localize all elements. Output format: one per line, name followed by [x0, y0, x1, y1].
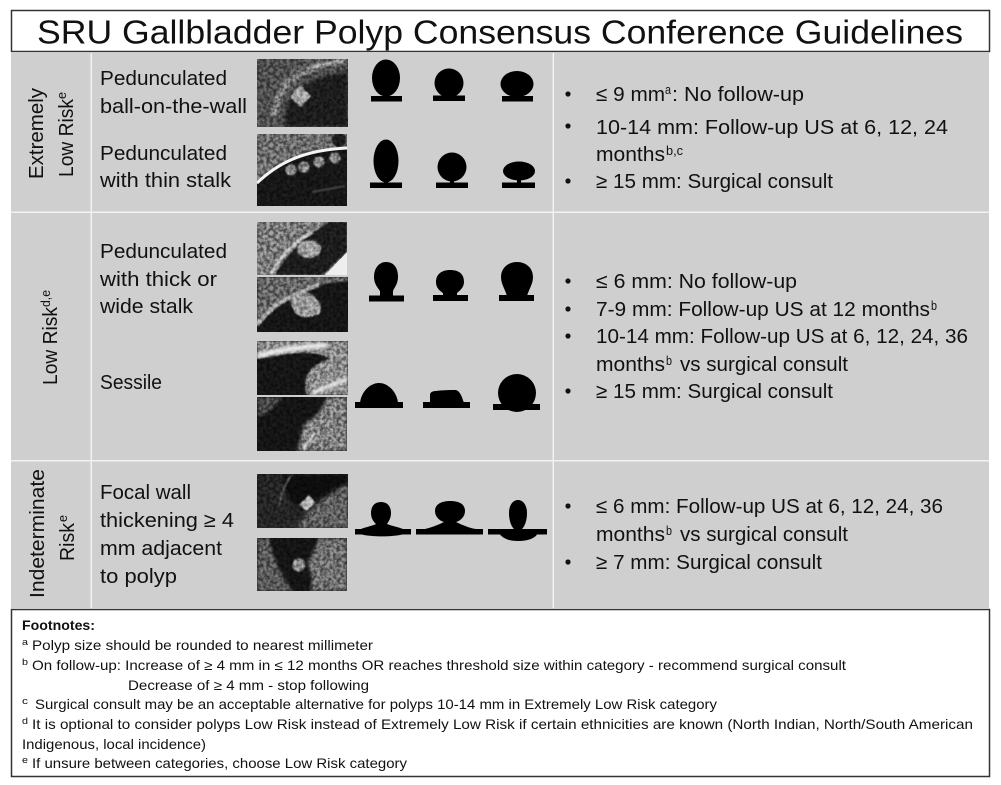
footnote c: c: [22, 696, 28, 707]
footnote c: Surgical consult may be an acceptable alternative for polyps 10-14 mm in Extremely Low Risk category: [35, 697, 717, 712]
risk label: extremely low risk: Low Risk: [55, 98, 78, 177]
polyp diagrams: thick or wide stalk: [369, 262, 534, 302]
risk label: indeterminate risk: e: [56, 515, 70, 522]
ultrasound image: sessile 1: [257, 341, 348, 395]
management recommendations: extremely low risk: ≥ 15 mm: Surgical consult: [596, 170, 833, 193]
management recommendations: indeterminate risk: ≥ 7 mm: Surgical consult: [596, 551, 822, 574]
ultrasound image: sessile 2: [257, 397, 347, 451]
footnote b: b: [22, 657, 28, 668]
polyp type label: mm adjacent: [100, 537, 222, 560]
polyp diagrams: sessile: [355, 374, 540, 412]
polyp diagrams: focal wall thickening: [355, 500, 547, 541]
footnotes heading: Footnotes:: [22, 618, 95, 633]
management recommendations: low risk: b: [931, 299, 937, 313]
management recommendations: extremely low risk: ≤ 9 mm: [596, 83, 665, 106]
management recommendations: indeterminate risk: vs surgical consult: [680, 523, 848, 546]
management recommendations: indeterminate risk: ≤ 6 mm: Follow-up US at 6, 12, 24, 36: [596, 495, 943, 518]
footnote e: If unsure between categories, choose Low Risk category: [32, 756, 407, 771]
risk label: indeterminate risk: Indeterminate: [26, 469, 49, 598]
footnote d: [22, 716, 973, 752]
footnote a: a: [22, 637, 29, 648]
ultrasound image: thick stalk 2: [257, 277, 348, 332]
polyp diagrams: ball-on-the-wall: [371, 60, 534, 102]
ultrasound image: focal wall thickening 2: [257, 538, 347, 591]
management recommendations: low risk: b: [666, 354, 672, 368]
management recommendations: low risk: ≥ 15 mm: Surgical consult: [596, 380, 833, 403]
polyp type labels: ball-on-the-wall: [100, 95, 247, 118]
risk label: extremely low risk: e: [55, 92, 69, 99]
management recommendations: low risk: [565, 270, 968, 403]
management recommendations: indeterminate risk: [565, 495, 943, 574]
management recommendations: low risk: ≤ 6 mm: No follow-up: [596, 270, 797, 293]
panel: extremely low risk: [25, 59, 948, 206]
management recommendations: extremely low risk: 10-14 mm: Follow-up US at 6, 12, 24: [596, 116, 948, 139]
polyp type labels: wide stalk: [99, 295, 194, 318]
polyp type label: Focal wall: [100, 481, 191, 504]
management recommendations: extremely low risk: b,c: [666, 144, 683, 158]
polyp type labels: Pedunculated: [100, 240, 227, 263]
polyp type label: to polyp: [100, 565, 177, 588]
risk label: low risk: Low Risk: [39, 306, 62, 385]
management recommendations: extremely low risk: [565, 83, 948, 193]
footnote e: e: [22, 755, 28, 766]
footnote d: d: [22, 716, 28, 727]
management recommendations: indeterminate risk: b: [666, 524, 672, 538]
polyp type labels: with thick or: [99, 268, 217, 291]
polyp diagrams: thin stalk: [370, 140, 535, 188]
polyp type labels: Pedunculated: [100, 67, 227, 90]
risk label: low risk: d,e: [39, 290, 53, 307]
polyp type labels: [99, 67, 247, 192]
ultrasound image: ball-on-the-wall: [257, 59, 348, 127]
panel: footnotes: [12, 610, 990, 776]
footnote b: [22, 657, 846, 693]
management recommendations: extremely low risk: a: [665, 83, 671, 97]
polyp type labels: with thin stalk: [99, 169, 232, 192]
footnote d: It is optional to consider polyps Low Risk instead of Extremely Low Risk if certain ethnicities are known (North Indian, North/South American: [32, 717, 973, 732]
polyp type label: thickening ≥ 4: [100, 509, 234, 532]
management recommendations: low risk: 10-14 mm: Follow-up US at 6, 12, 24, 36: [596, 325, 968, 348]
footnote a: Polyp size should be rounded to nearest millimeter: [32, 638, 373, 653]
management recommendations: extremely low risk: : No follow-up: [672, 83, 804, 106]
management recommendations: indeterminate risk: months: [596, 523, 665, 546]
panel: low risk: [39, 222, 968, 451]
polyp type label: [100, 481, 234, 588]
management recommendations: low risk: 7-9 mm: Follow-up US at 12 months: [596, 298, 930, 321]
risk label: extremely low risk: Extremely: [25, 87, 48, 179]
ultrasound image: thin stalk: [257, 134, 347, 206]
management recommendations: extremely low risk: months: [596, 143, 665, 166]
polyp type labels: [99, 240, 227, 394]
footnote b: On follow-up: Increase of ≥ 4 mm in ≤ 12 months OR reaches threshold size within category - recommend surgical consult: [32, 658, 846, 673]
title: SRU Gallbladder Polyp Consensus Conference Guidelines: [37, 14, 963, 50]
footnote b: Decrease of ≥ 4 mm - stop following: [128, 678, 369, 693]
ultrasound image: thick stalk 1: [257, 222, 347, 275]
ultrasound image: focal wall thickening 1: [257, 474, 348, 528]
panel: indeterminate risk: [26, 469, 943, 598]
risk label: indeterminate risk: Risk: [56, 522, 79, 561]
polyp type labels: Pedunculated: [100, 142, 227, 165]
panel: guidelines table background: [11, 53, 989, 608]
polyp type labels: Sessile: [100, 371, 162, 394]
management recommendations: low risk: months: [596, 353, 665, 376]
risk label: extremely low risk: [25, 87, 78, 179]
management recommendations: low risk: vs surgical consult: [680, 353, 848, 376]
risk label: indeterminate risk: [26, 469, 79, 598]
footnote d: Indigenous, local incidence): [22, 737, 206, 752]
